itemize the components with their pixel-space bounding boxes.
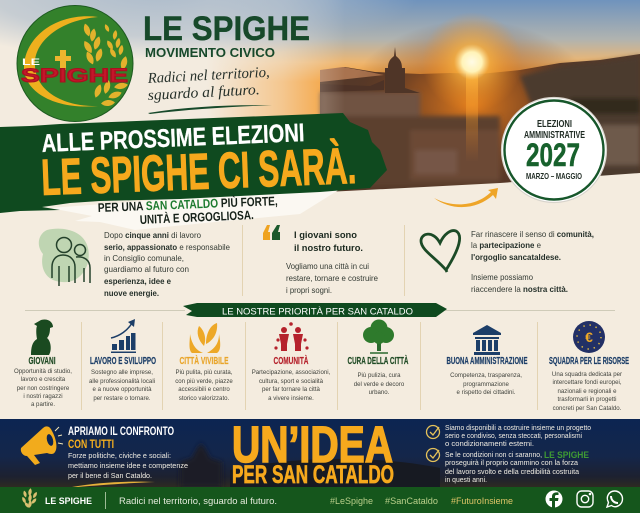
panel: community: l'orgoglio sancataldese. [471,253,561,262]
icon: megaphone [21,426,63,465]
icon: student [31,319,53,355]
headline [40,119,357,206]
priority: giovani: a partire. [31,401,55,408]
priority: città vivibile [175,323,233,402]
panel: youth: I giovani sono [294,230,358,240]
commitment text: Siamo disponibili a costruire insieme un progetto [445,425,591,432]
priority: giovani [14,319,72,408]
tagline: Radici nel territorio, [146,65,270,87]
icon: growth chart [111,319,136,353]
footer: LE SPIGHE [45,496,92,507]
hero photo: sunset over San Cataldo [0,0,640,200]
icon: euro stars: € [585,329,593,345]
priority: giovani: lavoro e crescita [21,376,66,383]
priority: comunità: cultura, sport e socialità [259,378,324,385]
panel: community: Far rinascere il senso di comunità, [471,230,594,239]
priority: città vivibile: con più verde, piazze [175,378,233,385]
commitment text [445,425,591,484]
priority: giovani: Opportunità di studio, [14,368,72,375]
priority: squadra per le risorse [549,321,629,412]
icon: quote [263,225,280,240]
priority: buona amministrazione [446,325,528,396]
panel: youth: i propri sogni. [286,286,332,295]
headline: ALLE PROSSIME ELEZIONI [41,119,305,158]
panel: youth [286,230,378,295]
priority: squadra per le risorse: trasformarli in progetti [558,396,616,403]
priority: lavoro: LAVORO E SVILUPPO [90,355,156,367]
tagline: sguardo al futuro. [147,82,260,104]
panel: community: riaccendere la nostra città. [471,285,568,294]
icon: footer wheat [21,488,38,509]
priority: buona amministrazione: Competenza, trasparenza, [450,372,522,379]
panel: youth: Vogliamo una città in cui [286,262,369,271]
priorities header [183,303,447,318]
priority: buona amministrazione: programmazione [463,381,509,388]
icon: heart [421,231,460,272]
panel: experience: serio, appassionato e responsabile [104,243,230,252]
priority: cura della città: urbano. [369,389,390,396]
priority: squadra per le risorse: intercettare fondi europei, [552,379,622,386]
priority: città vivibile: storico valorizzato. [179,395,230,402]
priorities header: LE NOSTRE PRIORITÀ PER SAN CATALDO [222,306,413,318]
panel: experience [104,231,230,298]
open dialogue text: Forze politiche, civiche e sociali: [68,453,171,460]
white brush behind subtitle [50,186,345,230]
priority: comunità: Partecipazione, associazioni, [252,369,331,376]
election badge [502,98,606,202]
priority: comunità: per far tornare la città [262,386,321,393]
arrow to badge [434,188,498,207]
priority: città vivibile: accessibili e centro [178,386,230,393]
open dialogue text: CON TUTTI [68,439,114,451]
tagline [146,65,272,114]
panel: experience: guardiamo al futuro con [104,265,189,274]
commitment text: LE SPIGHE [544,450,589,461]
priority: squadra per le risorse: concreti per San Cataldo. [553,405,622,412]
big slogan: PER SAN CATALDO [232,461,394,489]
panel: experience: Dopo cinque anni di lavoro [104,231,201,240]
priority: buona amministrazione: BUONA AMMINISTRAZIONE [446,355,528,367]
priority: lavoro: e a nuove opportunità [93,386,152,393]
icon: check 1 [426,426,440,438]
open dialogue text: mettiamo insieme idee e competenze [68,463,188,470]
priority: comunità: a vivere insieme. [268,395,314,402]
priority: lavoro [89,319,156,402]
open dialogue text: per il bene di San Cataldo. [68,473,152,480]
priority: giovani: i nostri ragazzi [23,393,63,400]
panel: experience: nuove energie. [104,289,159,298]
icon: facebook [546,490,562,508]
icon: bank [473,325,501,355]
election badge: AMMINISTRATIVE [524,130,585,141]
icon: hands and leaf [190,323,220,353]
footer: #SanCataldo [385,496,438,507]
priority: lavoro: alle professionalità locali [89,378,155,385]
bottom navy band [0,419,640,487]
green brush banner [0,113,387,213]
priority: cura della città: del verde e decoro [354,381,405,388]
priority: città vivibile: Più pulita, più curata, [176,369,233,376]
footer: #FuturoInsieme [451,496,513,507]
church tower [385,47,420,93]
logo wheat [82,23,129,107]
priority: squadra per le risorse: nazionali e regionali e [558,388,617,395]
logo wordmark: SPIGHE [21,66,128,87]
priority: cura della città: Più pulizia, cura [357,372,401,379]
commitment text: del lavoro svolto e della credibilità costruita [445,469,579,476]
priority: giovani: GIOVANI [28,355,56,367]
logo crescent [24,16,98,107]
big slogan: UN’IDEA [232,416,393,473]
priority: città vivibile: CITTÀ VIVIBILE [180,354,228,367]
panel: experience: esperienza, idee e [104,277,171,286]
election badge: ELEZIONI [537,119,572,130]
priority: lavoro: per restare o tornare. [93,395,151,402]
priority: buona amministrazione: e rispetto dei cittadini. [457,389,516,396]
priority: giovani: per non costringere [17,385,70,392]
priority: lavoro: Sostegno alle imprese, [91,369,153,376]
commitment text: Se le condizioni non ci saranno, [445,452,542,459]
cream lower page edge [250,173,640,330]
logo wordmark: LE [22,57,40,68]
brand heading: MOVIMENTO CIVICO [145,46,275,60]
subtitle [98,193,278,227]
brand heading: LE SPIGHE [143,10,310,48]
icon: whatsapp [607,491,622,507]
footer: Radici nel territorio, sguardo al futuro. [119,496,277,507]
panel: community: la partecipazione e [471,241,541,250]
headline: LE SPIGHE CI SARÀ. [40,137,357,206]
commitment text: proseguirà il proprio cammino con la forza [445,460,578,467]
priority: cura della città [348,320,409,396]
subtitle: PER UNA SAN CATALDO PIÙ FORTE, [98,193,278,215]
open dialogue text: APRIAMO IL CONFRONTO [68,426,174,438]
subtitle: UNITÀ E ORGOGLIOSA. [139,207,254,227]
priority: comunità: COMUNITÀ [274,354,309,367]
icon: community [274,322,309,351]
commitment text: serio e condiviso, senza steccati, personalismi [445,433,582,440]
priority: cura della città: CURA DELLA CITTÀ [348,354,409,367]
footer [0,487,640,513]
election badge: MARZO – MAGGIO [526,171,582,181]
panel: community [471,230,594,294]
commitment text: o condizionamenti esterni. [445,441,534,448]
priority: comunità [252,322,331,402]
priority: squadra per le risorse: Una squadra dedicata per [552,371,622,378]
big slogan [232,416,394,489]
icon: people [39,229,90,286]
election badge: 2027 [526,137,580,173]
logo cross [55,50,71,70]
open dialogue text [68,426,188,487]
commitment text: in questi anni. [445,477,487,484]
logo [17,6,133,122]
icon: instagram [577,491,593,507]
logo wordmark [21,57,128,87]
panel: youth: il nostro futuro. [294,243,363,253]
icon: check 2 [426,448,440,462]
panel: community: Insieme possiamo [471,273,533,282]
footer: #LeSpighe [330,496,373,507]
panel: experience: in Consiglio comunale, [104,254,184,263]
panel: youth: restare, tornare e costruire [286,274,378,283]
icon: tree [363,320,394,353]
